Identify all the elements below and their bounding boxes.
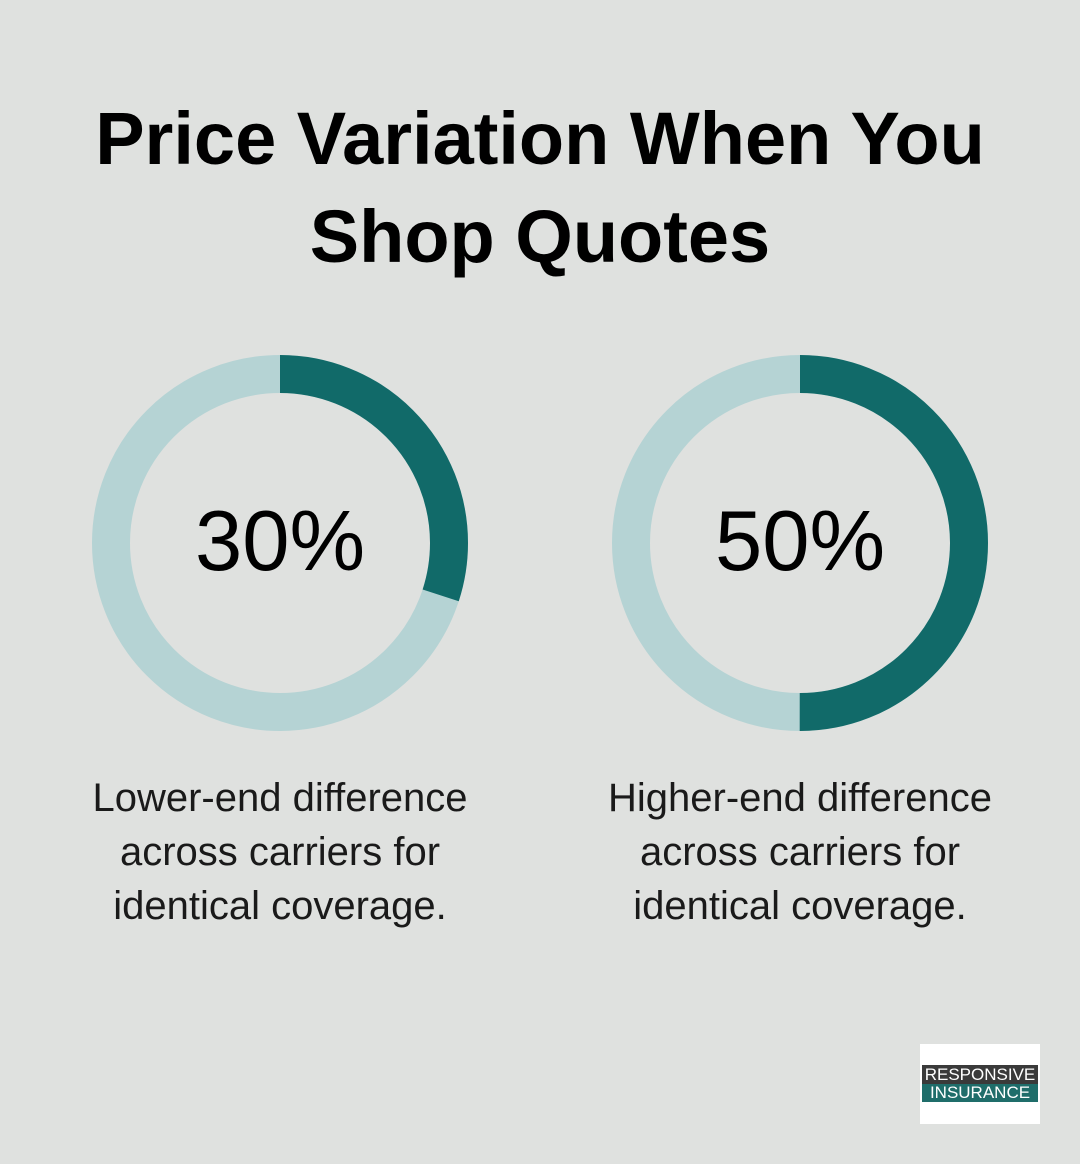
donut: 30%: 30% [195,494,365,589]
donut: 50% [631,374,969,712]
logo: RESPONSIVE [925,1065,1035,1084]
caption right: Higher-end difference [608,776,992,820]
caption right [608,776,992,928]
title [95,97,985,278]
donut: 50%: 50% [715,494,885,589]
caption left: Lower-end difference [92,776,468,820]
caption right: across carriers for [640,830,960,874]
caption right: identical coverage. [633,884,967,928]
title: Shop Quotes [310,195,770,278]
logo: INSURANCE [930,1083,1030,1102]
logo [920,1044,1040,1124]
caption left: across carriers for [120,830,440,874]
caption left [92,776,468,928]
donut: 30% [111,374,449,712]
caption left: identical coverage. [113,884,447,928]
title: Price Variation When You [95,97,985,180]
